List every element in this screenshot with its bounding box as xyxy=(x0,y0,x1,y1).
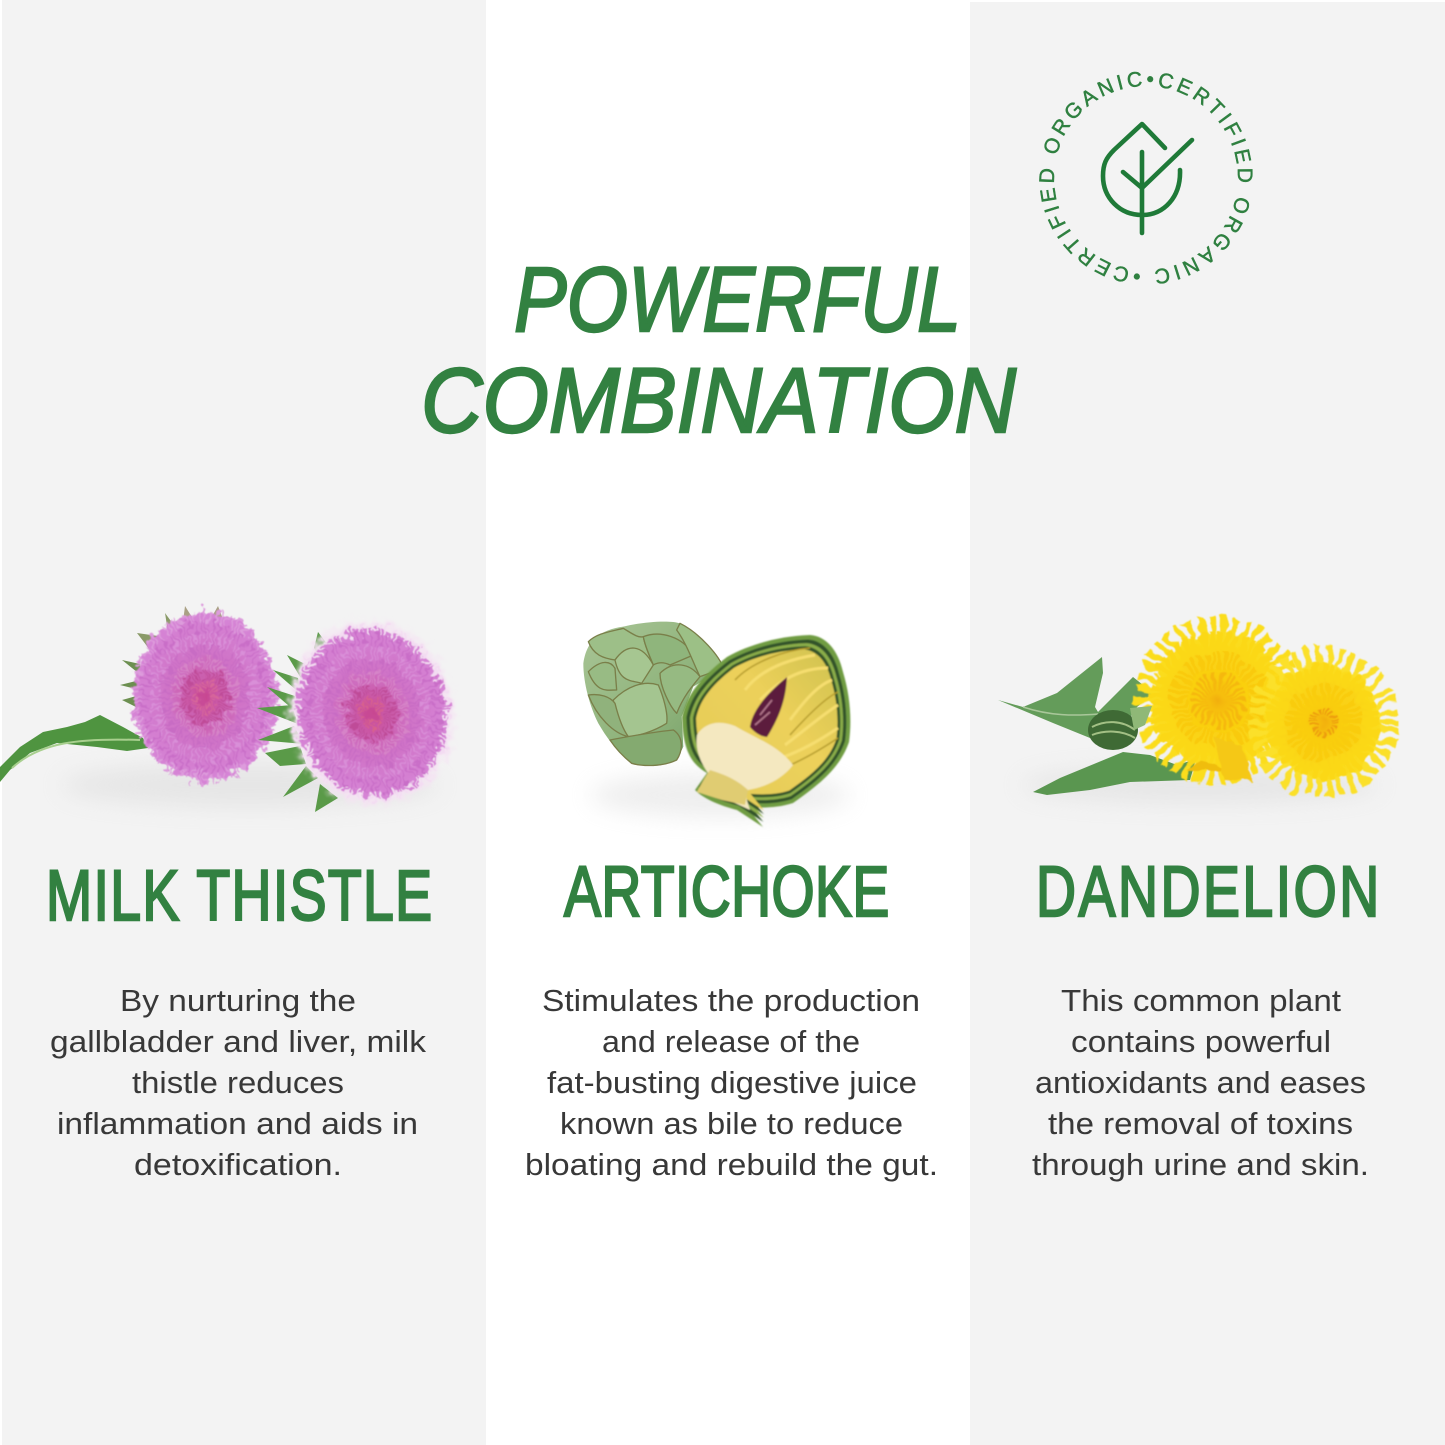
icon: dandelion flowers xyxy=(998,616,1395,803)
icon: milk thistle flowers xyxy=(0,606,470,819)
heading: dandelion: DANDELION xyxy=(1036,852,1379,932)
cut artichoke half xyxy=(682,635,850,827)
text: artichoke description xyxy=(525,983,938,1182)
title: POWERFUL xyxy=(514,249,961,351)
whole artichoke xyxy=(583,622,723,766)
text: artichoke description: Stimulates the production xyxy=(542,983,920,1018)
text: dandelion description: through urine and skin. xyxy=(1032,1147,1369,1182)
icon: leaf with check mark xyxy=(1103,124,1192,233)
sepals left flower xyxy=(120,606,224,708)
text: dandelion description: the removal of toxins xyxy=(1048,1106,1353,1141)
heading: milk thistle: MILK THISTLE xyxy=(46,856,432,936)
leaves xyxy=(998,657,1153,738)
text: artichoke description: bloating and rebuild the gut. xyxy=(525,1147,938,1182)
stem leaf xyxy=(0,715,148,782)
right flower head xyxy=(274,607,470,819)
text: milk thistle description: detoxification. xyxy=(134,1147,342,1182)
bud xyxy=(1088,706,1152,750)
badge: certified organic: •CERTIFIED ORGANIC•CERTIFIED ORGANIC xyxy=(1039,72,1253,284)
text: dandelion description: antioxidants and eases xyxy=(1035,1065,1366,1100)
text: dandelion description: This common plant xyxy=(1061,983,1341,1018)
left flower xyxy=(1134,616,1302,784)
text: artichoke description: and release of the xyxy=(602,1024,860,1059)
text: milk thistle description xyxy=(50,983,427,1182)
panel: artichoke xyxy=(525,622,938,1182)
text: milk thistle description: gallbladder and liver, milk xyxy=(50,1024,427,1059)
heading: artichoke: ARTICHOKE xyxy=(564,852,889,932)
text: milk thistle description: inflammation and aids in xyxy=(57,1106,418,1141)
title: COMBINATION xyxy=(421,350,1017,452)
panel: dandelion xyxy=(998,616,1395,1182)
text: milk thistle description: By nurturing the xyxy=(120,983,356,1018)
left flower head xyxy=(133,613,277,781)
panel: milk thistle xyxy=(0,606,470,1182)
text: artichoke description: known as bile to reduce xyxy=(560,1106,903,1141)
right flower xyxy=(1251,650,1395,794)
text: dandelion description xyxy=(1032,983,1369,1182)
text: milk thistle description: thistle reduces xyxy=(132,1065,344,1100)
sepals right flower xyxy=(257,632,338,812)
icon: artichoke xyxy=(583,622,850,827)
text: dandelion description: contains powerful xyxy=(1071,1024,1331,1059)
title xyxy=(421,249,1017,452)
text: artichoke description: fat-busting digestive juice xyxy=(547,1065,917,1100)
